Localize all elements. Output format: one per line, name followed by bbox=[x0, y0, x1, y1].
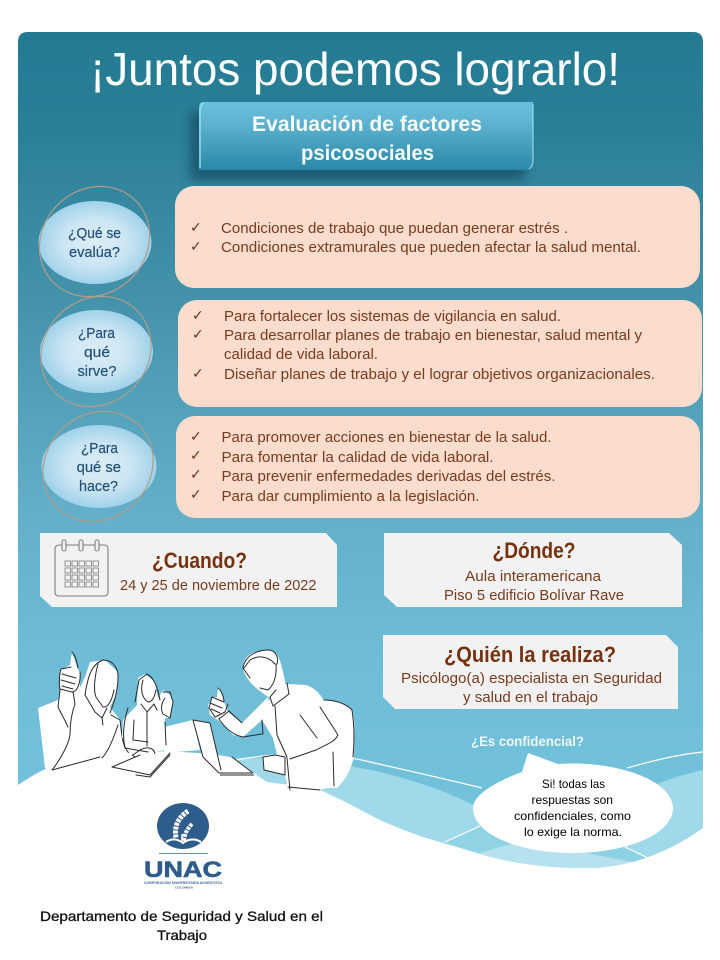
panel: para qué se hace answer: Para dar cumplimiento a la legislación. bbox=[222, 489, 480, 505]
panel: qué se evalúa answer bbox=[175, 186, 700, 288]
panel: para qué sirve answer: Diseñar planes de trabajo y el lograr objetivos organizacionales. bbox=[224, 367, 655, 383]
callout: speech bubble: Si! todas las bbox=[542, 777, 605, 791]
white flame and book motif bbox=[166, 811, 201, 843]
figure: woman on left bbox=[38, 652, 135, 771]
callout: speech bubble: respuestas son bbox=[532, 793, 613, 807]
panel: qué se evalúa answer: ✓ bbox=[190, 220, 202, 236]
panel: dónde: Piso 5 edificio Bolívar Rave bbox=[444, 588, 624, 604]
panel: para qué se hace answer: ✓ bbox=[190, 429, 202, 445]
laptop screen behind bbox=[164, 720, 200, 753]
bubble: qué se evalúa bbox=[17, 164, 172, 319]
bubble: para qué se hace bbox=[20, 389, 176, 544]
notebook on table bbox=[112, 753, 170, 777]
head bbox=[243, 650, 287, 698]
panel: quién la realiza bbox=[383, 635, 678, 709]
torso bbox=[262, 684, 340, 790]
bubble: para qué sirve: qué bbox=[84, 345, 110, 361]
panel: para qué se hace answer: ✓ bbox=[190, 487, 202, 503]
panel: para qué sirve answer: Para desarrollar planes de trabajo en bienestar, salud mental y bbox=[224, 328, 643, 344]
panel: para qué sirve answer: ✓ bbox=[192, 366, 204, 382]
panel: dónde bbox=[384, 533, 682, 607]
illustration: three colleagues giving thumbs up bbox=[38, 650, 355, 790]
bubble: para qué sirve: sirve? bbox=[78, 364, 116, 380]
panel: para qué se hace answer: Para promover acciones en bienestar de la salud. bbox=[222, 430, 552, 446]
footer: department name bbox=[40, 908, 323, 943]
footer: department name: Departamento de Seguridad y Salud en el bbox=[40, 908, 323, 924]
bubble: para qué se hace: hace? bbox=[79, 479, 118, 495]
bubble: para qué se hace: qué se bbox=[77, 460, 121, 476]
panel: para qué sirve answer: calidad de vida laboral. bbox=[224, 347, 378, 363]
callout: speech bubble: confidenciales, como bbox=[514, 809, 631, 823]
logo: UNAC: COLOMBIA bbox=[175, 886, 194, 890]
panel: para qué sirve answer: Para fortalecer los sistemas de vigilancia en salud. bbox=[224, 309, 561, 325]
logo: UNAC bbox=[144, 803, 222, 890]
heading: es confidencial: ¿Es confidencial? bbox=[471, 733, 584, 749]
panel: qué se evalúa answer: Condiciones de trabajo que puedan generar estrés . bbox=[221, 221, 568, 237]
panel: cuándo: 24 y 25 de noviembre de 2022 bbox=[120, 578, 316, 594]
figure: man on right bbox=[208, 650, 355, 790]
panel: qué se evalúa answer: Condiciones extramurales que pueden afectar la salud mental. bbox=[221, 240, 641, 256]
figure: woman in centre bbox=[122, 674, 173, 755]
title: ¡Juntos podemos lograrlo! bbox=[90, 43, 620, 95]
panel: quién la realiza: y salud en el trabajo bbox=[463, 690, 598, 706]
raised arm and hand bbox=[208, 688, 275, 738]
panel: dónde: ¿Dónde? bbox=[492, 538, 576, 563]
panel: cuándo: ¿Cuando? bbox=[152, 548, 247, 573]
icon: calendar bbox=[55, 540, 108, 596]
panel: para qué se hace answer bbox=[176, 416, 700, 518]
logo: UNAC: CORPORACIÓN UNIVERSITARIA ADVENTISTA bbox=[144, 880, 222, 885]
laptop bbox=[193, 720, 254, 775]
decorative wave bands bbox=[236, 752, 703, 880]
subtitle button: psicosociales bbox=[301, 142, 434, 165]
subtitle button: Evaluación de factores bbox=[252, 113, 482, 136]
panel: quién la realiza: ¿Quién la realiza? bbox=[444, 642, 616, 667]
logo: UNAC: UNAC bbox=[144, 857, 222, 882]
footer: department name: Trabajo bbox=[157, 927, 207, 943]
callout: speech bubble: lo exige la norma. bbox=[524, 825, 622, 839]
bubble: qué se evalúa: evalúa? bbox=[69, 245, 120, 261]
bubble: para qué sirve bbox=[18, 274, 174, 429]
bubble: para qué sirve: ¿Para bbox=[78, 326, 116, 342]
subtitle button bbox=[190, 102, 533, 180]
panel: para qué se hace answer: Para fomentar la calidad de vida laboral. bbox=[222, 450, 494, 466]
panel: para qué sirve answer bbox=[178, 300, 702, 407]
bubble: para qué se hace: ¿Para bbox=[81, 441, 119, 457]
panel: para qué se hace answer: ✓ bbox=[190, 448, 202, 464]
panel: para qué sirve answer: ✓ bbox=[192, 327, 204, 343]
callout: speech bubble bbox=[473, 753, 673, 853]
white wave table and lower page bbox=[18, 751, 703, 960]
panel: para qué se hace answer: Para prevenir enfermedades derivadas del estrés. bbox=[222, 469, 556, 485]
panel: quién la realiza: Psicólogo(a) especialista en Seguridad bbox=[401, 671, 662, 687]
panel: cuándo bbox=[40, 533, 337, 607]
bubble: qué se evalúa: ¿Qué se bbox=[68, 226, 121, 242]
panel: para qué se hace answer: ✓ bbox=[190, 467, 202, 483]
panel: qué se evalúa answer: ✓ bbox=[190, 239, 202, 255]
panel: dónde: Aula interamericana bbox=[465, 569, 602, 585]
panel: para qué sirve answer: ✓ bbox=[192, 308, 204, 324]
